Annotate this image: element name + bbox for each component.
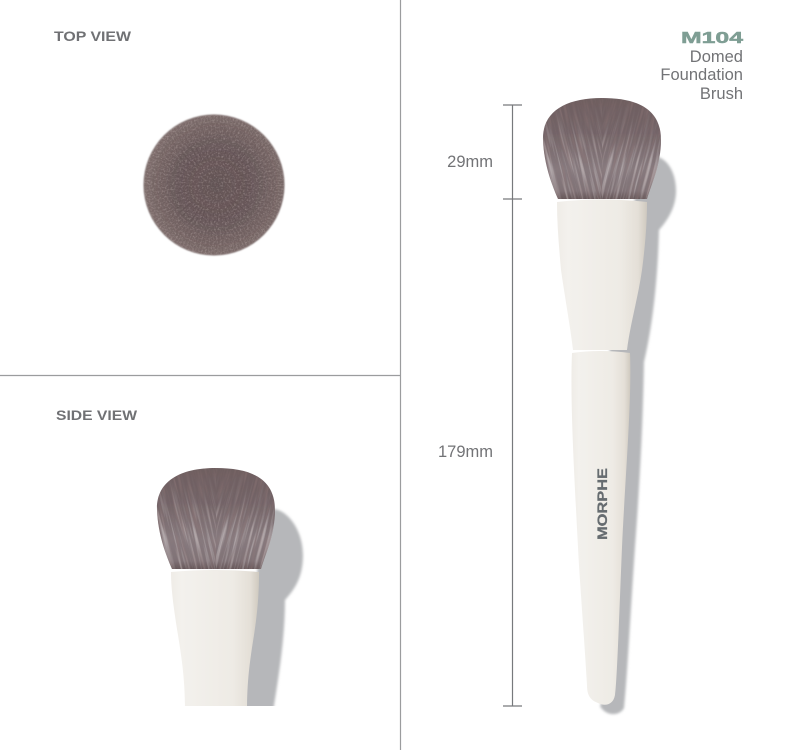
product name xyxy=(660,48,743,103)
illustration: brush side view xyxy=(156,468,304,706)
product name: Domed xyxy=(690,48,743,66)
product name: Foundation xyxy=(660,66,743,84)
product name: Brush xyxy=(700,85,743,103)
shadow: side view brush xyxy=(247,508,304,706)
panel dividers xyxy=(0,0,400,750)
bristles: side view xyxy=(156,468,275,569)
illustration: main brush xyxy=(542,98,661,705)
ferrule: main brush xyxy=(557,200,647,350)
bristles: main brush xyxy=(542,98,661,199)
brand logo on handle: MORPHE xyxy=(595,468,610,540)
shadow: main brush xyxy=(600,156,676,714)
ferrule: side view xyxy=(171,570,259,712)
label: 179mm: 179mm xyxy=(438,443,493,461)
product title block xyxy=(660,30,743,103)
label: 29mm: 29mm xyxy=(447,153,493,171)
product code: M104 xyxy=(681,30,743,47)
heading: side view: SIDE VIEW xyxy=(56,407,138,423)
heading: top view: TOP VIEW xyxy=(54,28,132,44)
icon: brush head from above xyxy=(144,114,284,256)
handle: main brush xyxy=(571,351,630,705)
dimension line xyxy=(503,105,522,706)
